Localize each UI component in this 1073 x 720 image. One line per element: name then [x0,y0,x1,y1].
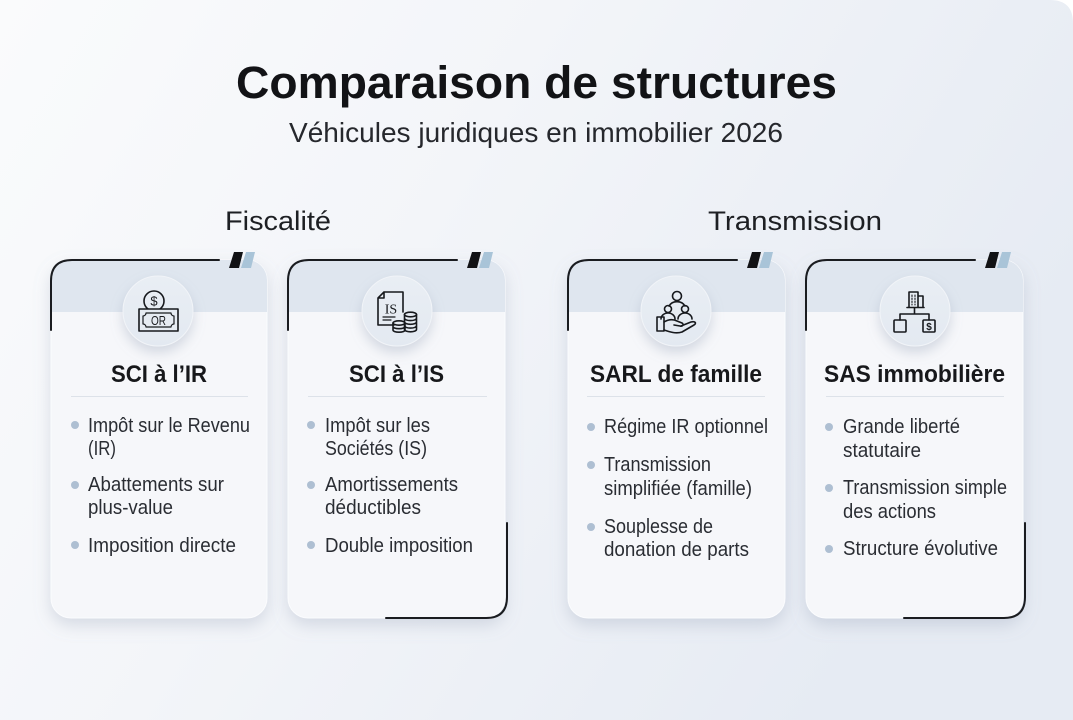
icon: tax document with coins [378,292,416,332]
bullet list: des actions [843,501,936,523]
bullet list [71,415,250,557]
bullet list: Régime IR optionnel [604,416,768,438]
bullet list [587,416,768,561]
panel: SAS immobilière [806,252,1025,618]
panel: SAS immobilière: $ [926,322,932,333]
panel: SCI à l'IR: OR [151,313,166,328]
bullet list: Transmission simple [843,477,1007,499]
bullet list [825,416,1007,560]
bullet list: simplifiée (famille) [604,478,752,500]
bullet list: Abattements sur [88,474,224,496]
bullet list: Amortissements [325,474,458,496]
bullet list: plus-value [88,497,173,519]
icon: banknote with coin [139,291,178,331]
subtitle: Véhicules juridiques en immobilier 2026 [289,117,783,148]
bullet list: (IR) [88,438,116,460]
panel: SCI à l'IR: $ [150,294,158,308]
panel: SCI à l'IR [51,252,267,618]
bullet list: déductibles [325,497,421,519]
bullet list: Structure évolutive [843,538,998,560]
bullet list: Double imposition [325,535,473,557]
bullet list: Impôt sur les [325,415,430,437]
card title: SCI à l’IS [349,361,444,388]
bullet list: Imposition directe [88,535,236,557]
panel: SCI à l'IS: IS [385,302,397,318]
card title: SCI à l’IR [111,361,207,388]
card title: SAS immobilière [824,361,1005,388]
heading: Fiscalité: Fiscalité [225,206,331,236]
title: Comparaison de structures [236,57,837,108]
icon: family on open hand [657,292,695,333]
bullet list [307,415,473,557]
bullet list: Grande liberté [843,416,960,438]
bullet list: Sociétés (IS) [325,438,427,460]
bullet list: Souplesse de [604,516,713,538]
bullet list: donation de parts [604,539,749,561]
panel: SCI à l'IS [288,252,507,618]
panel: SARL de famille [568,252,785,618]
card title: SARL de famille [590,361,762,388]
icon: building org chart [894,292,935,332]
bullet list: Impôt sur le Revenu [88,415,250,437]
bullet list: statutaire [843,440,921,462]
heading: Transmission: Transmission [708,206,882,236]
bullet list: Transmission [604,454,711,476]
